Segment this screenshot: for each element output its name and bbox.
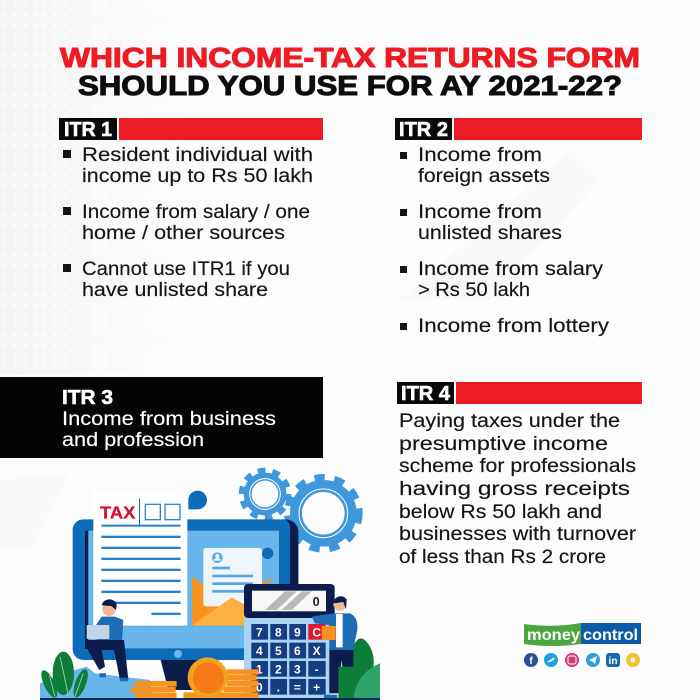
social icons [524, 653, 640, 667]
ITR 1 bullet list: Resident individual with [82, 145, 313, 166]
ITR 2 heading bar: ITR 2 [399, 119, 448, 141]
ITR 4 paragraph: presumptive income [399, 434, 608, 455]
icon: calculator: 3 [294, 662, 301, 676]
icon: calculator [244, 584, 335, 698]
ITR 2 bullet list: unlisted shares [418, 223, 562, 244]
ITR 1 heading bar [59, 118, 323, 141]
icon: calculator: . [277, 680, 280, 694]
title: SHOULD YOU USE FOR AY 2021-22? [78, 70, 622, 101]
panel: ITR 1 [59, 118, 323, 301]
ITR 2 bullet list: Income from lottery [418, 316, 610, 337]
logo: moneycontrol: control [583, 627, 638, 644]
icon: calculator: = [294, 680, 301, 694]
ground [40, 667, 153, 698]
icon: left plant [38, 652, 91, 700]
ITR 4 paragraph: scheme for professionals [399, 456, 636, 477]
title: WHICH INCOME-TAX RETURNS FORM [60, 42, 640, 73]
icon: monitor [73, 519, 298, 690]
illustration: tax computer and calculator [38, 471, 380, 700]
icon: calculator: X [313, 644, 321, 658]
icon: calculator: 1 [256, 662, 263, 676]
icon: calculator: 9 [294, 625, 301, 639]
icon: calculator: 0 [313, 595, 320, 609]
ITR 1 bullet list: Cannot use ITR1 if you [82, 259, 290, 280]
icon: sitting person with laptop [86, 599, 128, 681]
ITR 1 bullet list: Income from salary / one [82, 202, 310, 223]
ITR 4 heading bar [397, 382, 642, 405]
icon: calculator: - [315, 662, 319, 676]
ITR 2 bullet list: > Rs 50 lakh [418, 280, 530, 301]
panel: ITR 3 [0, 377, 323, 458]
icon: tax document [93, 491, 187, 626]
icon: gears [242, 471, 358, 548]
icon: calculator: 0 [256, 680, 263, 694]
panel: ITR 2 [395, 118, 642, 337]
icon: calculator: 7 [256, 625, 263, 639]
social icons: in [609, 656, 617, 667]
icon: standing person [312, 596, 357, 698]
social icons: f [529, 656, 533, 667]
icon: calculator: 4 [256, 644, 263, 658]
icon: envelope [192, 548, 275, 626]
ITR 2 bullet list: Income from salary [418, 259, 604, 280]
ITR 2 bullet list: foreign assets [418, 166, 550, 187]
icon: right plant [338, 638, 380, 698]
ITR 4 paragraph: businesses with turnover [399, 524, 637, 545]
ITR 2 bullet list: Income from [418, 202, 542, 223]
panel: ITR 3: and profession [62, 430, 204, 451]
ITR 1 bullet list [63, 145, 313, 301]
icon: calculator: 2 [275, 662, 282, 676]
icon: tax document: TAX [100, 503, 135, 523]
ITR 4 paragraph: below Rs 50 lakh and [399, 502, 602, 523]
ITR 4 heading bar: ITR 4 [401, 383, 451, 405]
ITR 1 bullet list: income up to Rs 50 lakh [82, 166, 313, 187]
icon: speech bubble [188, 491, 207, 509]
ITR 4 paragraph: Paying taxes under the [399, 411, 620, 432]
ITR 4 paragraph: having gross receipts [399, 479, 630, 500]
icon: calculator: + [313, 680, 320, 694]
panel: ITR 3: Income from business [62, 409, 276, 430]
icon: coins [131, 657, 258, 698]
icon: calculator: 6 [294, 644, 301, 658]
panel: ITR 3: ITR 3 [62, 387, 113, 409]
ITR 2 bullet list: Income from [418, 145, 542, 166]
icon: calculator: 5 [275, 644, 282, 658]
icon: calculator: C [312, 625, 321, 639]
ITR 2 bullet list [400, 145, 610, 337]
logo: moneycontrol: money [527, 627, 580, 644]
ITR 4 paragraph [399, 411, 637, 568]
ITR 1 heading bar: ITR 1 [64, 119, 112, 141]
ITR 1 bullet list: have unlisted share [82, 280, 268, 301]
logo: moneycontrol [523, 623, 641, 646]
ITR 2 heading bar [395, 118, 642, 141]
panel: ITR 4 [397, 382, 642, 568]
icon: calculator: 8 [275, 625, 282, 639]
ITR 1 bullet list: home / other sources [82, 223, 285, 244]
title [60, 42, 640, 101]
ITR 4 paragraph: of less than Rs 2 crore [399, 547, 606, 568]
